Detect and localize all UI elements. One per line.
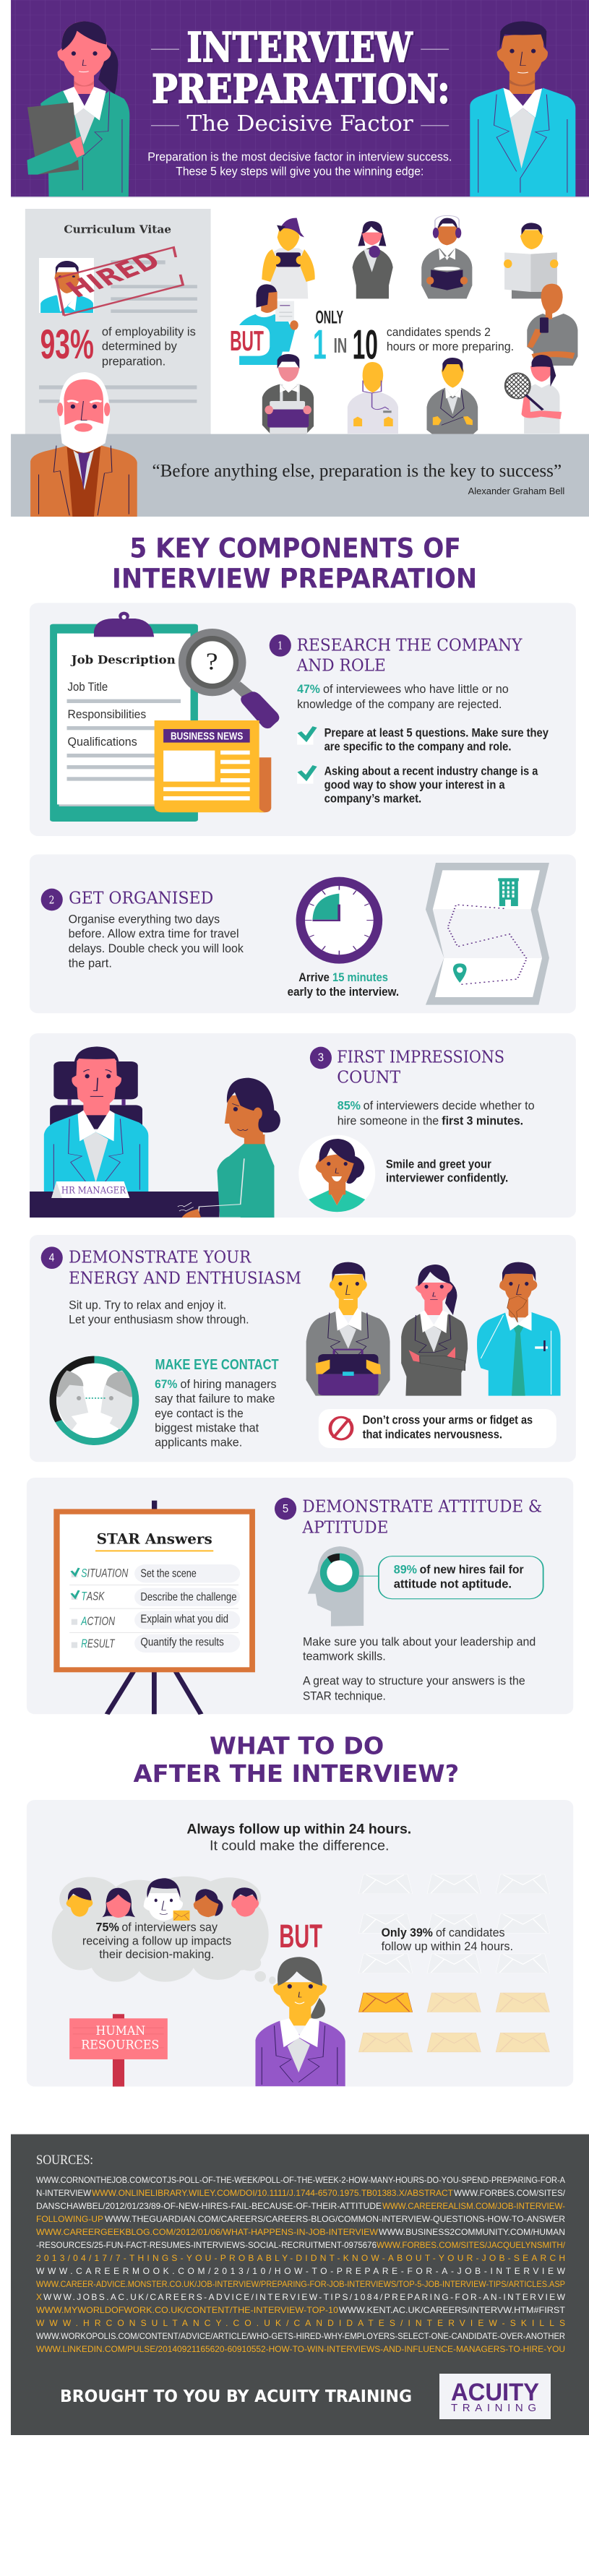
intro text: [147, 150, 452, 178]
text: organise: delays. Double check you will look: [69, 942, 244, 955]
text: source urls: WWW.CAREEREALISM.COM/JOB-INTERVIEW-: [382, 2201, 565, 2211]
text: source urls: [36, 2175, 566, 2354]
text: source urls: N-INTERVIEW: [36, 2188, 92, 2198]
text: 75 percent: their decision-making.: [99, 1947, 214, 1961]
stat: 1 in 10: ONLY: [316, 308, 343, 327]
panel: follow up: [27, 1800, 573, 2087]
text: source urls: WWW.HRCONSULTANCY.CO.UK/CANDIDATES/INTERVIEW-SKILLS: [36, 2318, 565, 2328]
person: doctor: [348, 362, 398, 434]
text: arrive 15 minutes: early to the interview.: [288, 985, 399, 999]
illustration: star answers easel: [53, 1501, 255, 1714]
row: result: [81, 1637, 224, 1650]
panel: step 2 get organised: [30, 854, 576, 1013]
illustration: interviewer faces: [66, 1878, 259, 1921]
stat: 93 percent: of employability is: [102, 324, 196, 338]
sign: human resources: HUMAN: [96, 2024, 145, 2038]
row: action: [80, 1614, 228, 1628]
illustration: woman with folder: [27, 21, 129, 197]
panel: step 5 attitude and aptitude: [27, 1478, 573, 1714]
text: organise: [69, 912, 244, 970]
checklist item 1: [297, 726, 549, 753]
text: organise: Organise everything two days: [69, 912, 220, 926]
illustration: people, top row: [262, 215, 558, 298]
text: source urls: WWW.FORBES.COM/SITES/JACQUELYNSMITH/: [377, 2240, 566, 2250]
text: always follow up: Always follow up within 24 hours.: [186, 1822, 411, 1837]
stamp: hired: HIRED: [60, 248, 167, 303]
icon: clipboard: Job Title: [68, 680, 108, 694]
row: task: TASK: [81, 1589, 105, 1603]
section: five key components: [30, 533, 576, 836]
text: source urls: WWW.JOBS.AC.UK/CAREERS-ADVICE/INTERVIEW-TIPS/1084/PREPARING-FOR-AN-INTERVIEW: [43, 2292, 566, 2302]
text: source urls: WWW.LINKEDIN.COM/PULSE/20140921165620-60910552-HOW-TO-WIN-INTERVIEWS-AND-INFLUENCE-MANAGERS-TO-HIRE-YOU: [36, 2344, 565, 2354]
illustration: woman with crossed arms: [401, 1265, 468, 1396]
row: action: ACTION: [80, 1614, 115, 1628]
text: organise: before. Allow extra time for travel: [69, 926, 239, 940]
text: make eye contact: applicants make.: [155, 1435, 242, 1449]
text: source urls: WWW.CAREERGEEKBLOG.COM/2012/01/06/WHAT-HAPPENS-IN-JOB-INTERVIEW: [36, 2227, 379, 2237]
callout: 89 percent: [379, 1556, 543, 1599]
stat: 93 percent: preparation.: [102, 354, 165, 368]
sign: human resources: RESOURCES: [81, 2038, 159, 2052]
person: woman with microphone: [353, 221, 393, 298]
stat: 93 percent: 93%: [40, 321, 94, 367]
text: make eye contact: eye contact is the: [155, 1406, 244, 1420]
text: always follow up: [186, 1822, 411, 1853]
text: only 39 percent: Only 39%: [382, 1926, 433, 1939]
illustration: star answers easel: STAR Answers: [97, 1530, 212, 1548]
person: bald man with phone: [527, 284, 577, 366]
heading: step 3: COUNT: [337, 1068, 401, 1087]
text: arrive 15 minutes: Arrive: [298, 970, 330, 984]
panel: step 1 research: [30, 603, 576, 836]
text: source urls: FOLLOWING-UP: [36, 2214, 103, 2224]
text: source urls: WWW.ONLINELIBRARY.WILEY.COM/DOI/10.1111/J.1744-6570.1975.TB01383.X/ABSTRACT: [92, 2188, 454, 2198]
row: action: Explain what you did: [140, 1614, 228, 1625]
text: smile and greet: interviewer confidently.: [386, 1171, 508, 1184]
icon: clock: [296, 877, 382, 964]
heading: step 2: GET ORGANISED: [69, 889, 213, 908]
heading: [134, 1732, 459, 1788]
icon: prohibition sign: [330, 1417, 352, 1439]
title: [152, 24, 450, 112]
text: make eye contact: 67%: [155, 1377, 177, 1391]
text: smile and greet: [386, 1158, 508, 1184]
text: star advice: STAR technique.: [303, 1689, 386, 1702]
text: arrive 15 minutes: [288, 970, 399, 999]
panel: quote band: [11, 434, 589, 517]
heading: step 4: [41, 1246, 301, 1288]
icon: clipboard: Responsibilities: [68, 707, 146, 721]
heading: step 5: [275, 1497, 542, 1538]
illustration: man thinking: [477, 1262, 561, 1396]
panel: step 4 energy and enthusiasm: [30, 1235, 576, 1462]
text: source urls: WWW.KENT.AC.UK/CAREERS/INTERVW.HTM#FIRST: [339, 2305, 566, 2315]
stat: 1 in 10: 10: [353, 322, 378, 368]
callout: 89 percent: of new hires fail for: [420, 1563, 524, 1576]
text: star advice: [303, 1634, 536, 1702]
text: 75 percent: of interviewers say: [121, 1920, 218, 1934]
person: cap and tablet: [262, 218, 315, 298]
section: what to do after the interview: [27, 1732, 573, 2087]
heading: step 1: 1: [278, 639, 283, 652]
text: 85 percent: hire someone in the: [338, 1113, 439, 1127]
text: source urls: WWW.CAREERMOOK.COM/2013/10/HOW-TO-PREPARE-FOR-A-JOB-INTERVIEW: [36, 2266, 566, 2276]
intro text: These 5 key steps will give you the winning edge:: [176, 164, 424, 178]
heading: WHAT TO DO: [210, 1732, 384, 1760]
person: newspaper reader: [504, 223, 558, 298]
heading: step 5: 5: [283, 1503, 288, 1515]
text: 75 percent: receiving a follow up impacts: [82, 1934, 231, 1947]
heading: step 4: ENERGY AND ENTHUSIASM: [69, 1269, 301, 1288]
text: organise: the part.: [69, 956, 112, 970]
row: result: Quantify the results: [140, 1637, 224, 1648]
text: source urls: WWW.WORKOPOLIS.COM/CONTENT/ADVICE/ARTICLE/WHO-GETS-HIRED-WHY-EMPLOYERS-SELECT-ONE-CANDIDATE-OVER-ANOTHER: [36, 2331, 565, 2341]
illustration: smiling candidate portrait: [298, 1135, 375, 1212]
icon: newspaper: [155, 720, 271, 812]
text: 85 percent: first 3 minutes.: [442, 1114, 523, 1127]
row: result: RESULT: [81, 1637, 115, 1650]
text: make eye contact: MAKE EYE CONTACT: [155, 1356, 279, 1373]
heading: step 3: 3: [318, 1052, 324, 1064]
text: 47 percent: [297, 682, 509, 711]
text: 75 percent: [82, 1920, 231, 1961]
text: only 39 percent: follow up within 24 hours.: [382, 1939, 513, 1953]
text: sit up: Sit up. Try to relax and enjoy it.: [69, 1298, 226, 1311]
stat: 1 in 10: candidates spends 2: [387, 325, 491, 339]
heading: step 4: 4: [49, 1252, 54, 1264]
heading: step 3: [310, 1047, 504, 1087]
panel: curriculum vitae sheet: Curriculum Vitae: [64, 223, 171, 236]
text: source urls: -RESOURCES/25-FUN-FACT-RESUMES-INTERVIEWS-SOCIAL-RECRUITMENT-0975676: [36, 2240, 377, 2250]
icon: clipboard: [50, 612, 198, 822]
text: source urls: WWW.BUSINESS2COMMUNITY.COM/HUMAN: [379, 2227, 565, 2237]
panel: follow up: BUT: [279, 1918, 322, 1955]
illustration: hr manager at desk: HR MANAGER: [61, 1185, 126, 1196]
logo: acuity training: ACUITY: [451, 2379, 539, 2406]
heading: sources: SOURCES:: [36, 2153, 93, 2168]
callout: don't cross your arms: [319, 1409, 556, 1448]
person: apron and typewriter: [262, 354, 314, 434]
callout: 89 percent: 89%: [394, 1563, 417, 1576]
text: make eye contact: biggest mistake that: [155, 1421, 259, 1434]
heading: step 1: AND ROLE: [296, 656, 386, 676]
icon: building: [498, 878, 519, 906]
illustration: people, bottom row: [262, 354, 562, 434]
icon: map: [426, 863, 549, 1005]
icon: magnifying glass: ?: [206, 647, 218, 675]
icon: clipboard: Qualifications: [68, 735, 137, 749]
person: headphones and book: [421, 215, 472, 298]
text: make eye contact: say that failure to make: [155, 1392, 275, 1405]
icon: location pin: [453, 963, 467, 983]
text: only 39 percent: of candidates: [436, 1926, 505, 1939]
illustration: thought cloud: [52, 1877, 276, 1984]
callout: 89 percent: attitude not aptitude.: [394, 1577, 512, 1590]
person: grey suit with folder: [426, 358, 478, 434]
photo: candidate: [39, 258, 94, 313]
text: source urls: 2013/04/17/7-THINGS-YOU-PROBABLY-DIDNT-KNOW-ABOUT-YOUR-JOB-SEARCH: [36, 2253, 565, 2263]
text: make eye contact: [155, 1356, 279, 1449]
icon: clipboard: Job Description: [70, 652, 176, 666]
logo: acuity training: [439, 2374, 551, 2419]
person: but speaker: BUT: [230, 324, 264, 356]
sign: human resources: [69, 2014, 168, 2087]
stat: 1 in 10: hours or more preparing.: [387, 340, 514, 353]
text: 85 percent: 85%: [338, 1099, 361, 1112]
text: sit up: [69, 1298, 249, 1326]
illustration: hiring manager woman: [255, 1957, 345, 2086]
text: source urls: WWW.MYWORLDOFWORK.CO.UK/CONTENT/THE-INTERVIEW-TOP-10: [36, 2305, 338, 2315]
panel: step 3 first impressions: [30, 1033, 576, 1218]
text: source urls: WWW.FORBES.COM/SITES/: [454, 2188, 566, 2198]
text: brought to you by: BROUGHT TO YOU BY ACUITY TRAINING: [60, 2387, 412, 2406]
panel: header banner: [11, 0, 589, 197]
stat: 1 in 10: 1: [313, 322, 327, 368]
subtitle: The Decisive Factor: [186, 111, 413, 137]
text: source urls: WWW.THEGUARDIAN.COM/CAREERS/CAREERS-BLOG/COMMON-INTERVIEW-QUESTIONS-HOW-TO-ANSWER: [105, 2214, 565, 2224]
text: 85 percent: [338, 1098, 535, 1127]
icon: newspaper: BUSINESS NEWS: [171, 731, 243, 742]
text: make eye contact: of hiring managers: [181, 1377, 277, 1391]
logo: acuity training: TRAINING: [451, 2402, 536, 2414]
stat: 93 percent: determined by: [102, 339, 177, 353]
stat: 1 in 10: [313, 308, 514, 368]
text: smile and greet: Smile and greet your: [386, 1158, 491, 1171]
row: situation: Set the scene: [140, 1568, 197, 1580]
person: tennis player: [505, 355, 562, 434]
illustration: alexander graham bell: [30, 372, 137, 517]
text: only 39 percent: [382, 1926, 513, 1953]
illustration: man in blue suit: [470, 21, 575, 197]
icon: magnifying glass: [179, 629, 279, 728]
illustration: envelopes: [358, 1874, 549, 2052]
row: task: Describe the challenge: [140, 1591, 236, 1603]
text: arrive 15 minutes: 15 minutes: [332, 970, 388, 984]
chart: head with 89 percent ring: [308, 1546, 379, 1627]
heading: [112, 533, 477, 595]
person: but speaker: [230, 284, 298, 365]
heading: step 2: [41, 889, 213, 910]
text: source urls: DANSCHAWBEL/2012/01/23/89-OF-NEW-HIRES-FAIL-BECAUSE-OF-THEIR-ATTITUDE: [36, 2201, 382, 2211]
chart: eye contact ring 67 percent: [50, 1356, 139, 1445]
illustration: hr manager at desk: [30, 1046, 220, 1218]
checklist item 2: [297, 764, 538, 805]
row: task: [81, 1589, 236, 1603]
heading: step 2: 2: [49, 893, 54, 906]
heading: step 5: APTITUDE: [302, 1518, 388, 1538]
text: source urls: X: [36, 2292, 42, 2302]
panel: curriculum vitae sheet: [25, 209, 211, 435]
row: situation: SITUATION: [81, 1566, 128, 1580]
checklist item 2: company’s market.: [324, 792, 421, 805]
heading: step 4: DEMONSTRATE YOUR: [69, 1248, 251, 1267]
stat: 1 in 10: IN: [334, 334, 347, 357]
panel: sources footer: [11, 2134, 589, 2435]
text: 75 percent: 75%: [96, 1921, 119, 1934]
section: statistics and quote: [11, 209, 589, 517]
text: 47 percent: 47%: [297, 682, 320, 696]
text: always follow up: It could make the difference.: [210, 1838, 390, 1853]
text: star advice: teamwork skills.: [303, 1649, 386, 1663]
heading: step 1: [270, 634, 523, 676]
illustration: candidate from the side: [178, 1078, 280, 1218]
illustration: man with briefcase: [306, 1262, 390, 1396]
text: sit up: Let your enthusiasm show through.: [69, 1312, 249, 1326]
